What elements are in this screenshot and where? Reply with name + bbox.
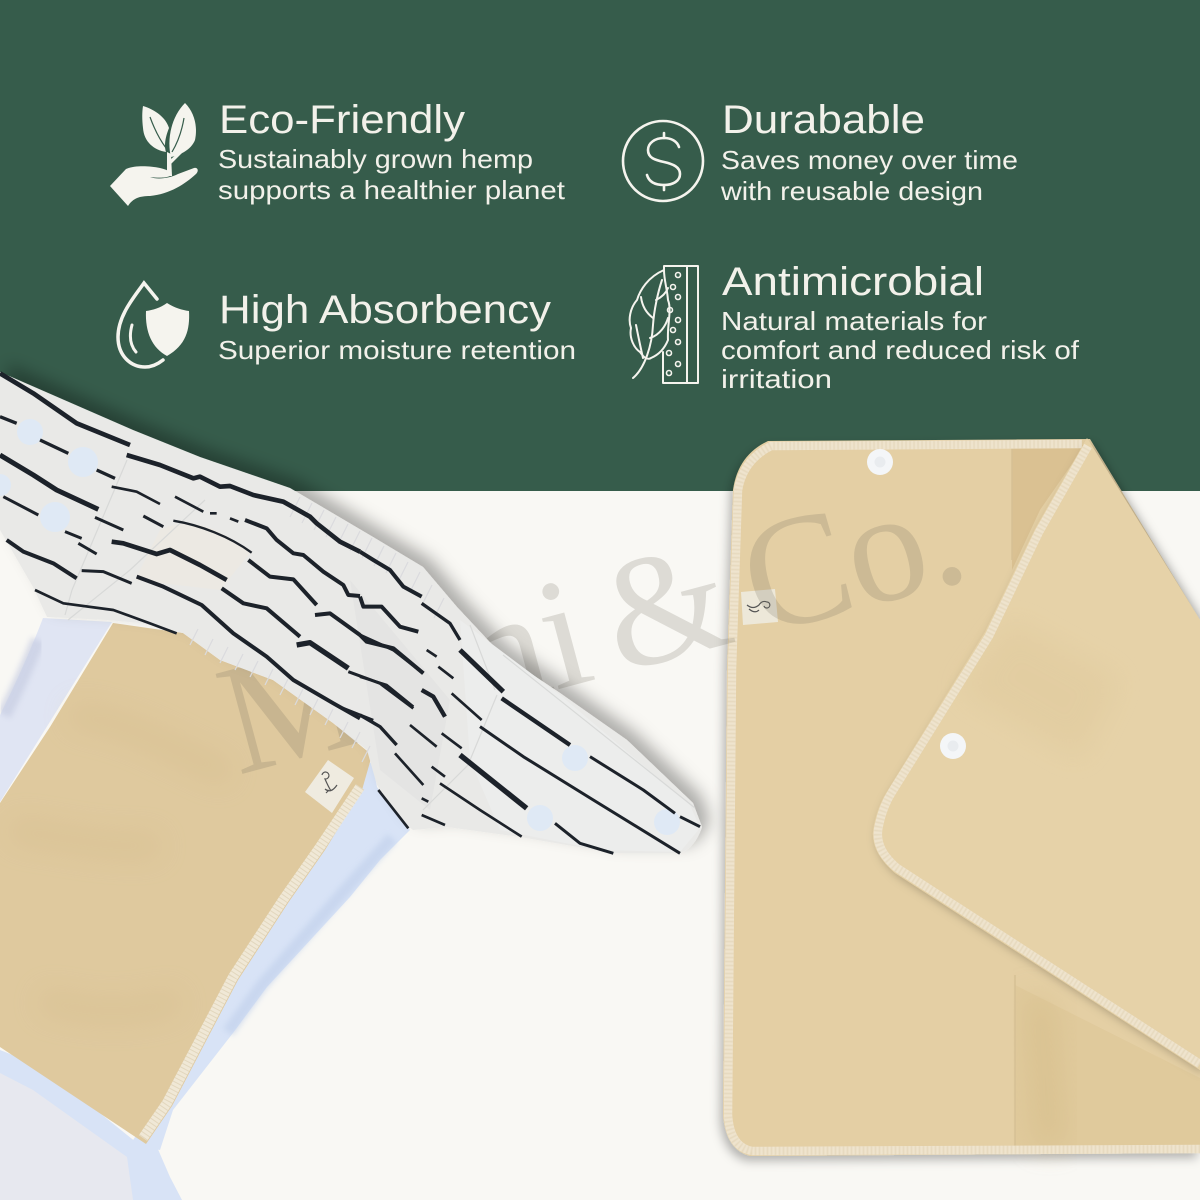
panel: green header band bbox=[0, 0, 1200, 491]
description: Saves money over time bbox=[721, 145, 1018, 175]
heading: Eco-Friendly bbox=[219, 98, 465, 142]
grey mesh panel bbox=[0, 1073, 133, 1200]
flap shape bbox=[873, 438, 1200, 1070]
description bbox=[721, 306, 1080, 394]
feature: Durable bbox=[623, 98, 1018, 206]
insert fabric shading bbox=[10, 715, 230, 1012]
description: Natural materials for bbox=[721, 306, 987, 336]
description bbox=[218, 144, 566, 205]
top snap button bbox=[867, 449, 893, 475]
wing shape bbox=[0, 372, 702, 853]
pad vertical seams bbox=[1012, 445, 1015, 1148]
description: supports a healthier planet bbox=[218, 175, 566, 205]
description: Superior moisture retention bbox=[218, 335, 576, 365]
heading: High Absorbency bbox=[219, 288, 551, 332]
wing seams bbox=[65, 460, 695, 810]
icon: dollar coin bbox=[623, 121, 703, 201]
flap stitched edge bbox=[878, 446, 1200, 1064]
icon: leaf and fabric layer bbox=[630, 266, 698, 383]
blue outer lining, upper left bbox=[0, 618, 112, 802]
wing black stripes, middle section bbox=[340, 552, 423, 720]
photo: folded hemp insert on the right bbox=[723, 439, 1200, 1156]
heading: Durabable bbox=[722, 98, 925, 142]
darker fold area, bottom bbox=[1015, 985, 1200, 1148]
insert label tag bbox=[305, 760, 354, 813]
photo: diaper body with insert bbox=[0, 618, 410, 1200]
description: comfort and reduced risk of bbox=[721, 335, 1080, 365]
icon: water drop with shield bbox=[118, 283, 189, 367]
wing black stripes, left section bbox=[0, 373, 360, 718]
photo: striped diaper wing bbox=[0, 372, 702, 853]
description: Sustainably grown hemp bbox=[218, 144, 533, 174]
blue elastic leg, lower right bbox=[130, 760, 410, 1150]
icon: hand holding sprout bbox=[110, 103, 198, 206]
photo: folded flap of the insert bbox=[873, 438, 1200, 1070]
feature: Antimicrobial bbox=[630, 260, 1080, 394]
elastic gathers bbox=[190, 497, 444, 762]
description bbox=[720, 145, 1018, 206]
flap shaded crease bbox=[960, 620, 1120, 760]
feature: High Absorbency bbox=[118, 283, 576, 367]
flap snap button bbox=[940, 733, 966, 759]
pad stitched edge bbox=[728, 444, 1200, 1151]
insert stitched seam bbox=[143, 787, 360, 1138]
main pad bbox=[723, 439, 1200, 1156]
pad label tag bbox=[741, 589, 778, 625]
wing pocket and panels bbox=[135, 524, 700, 852]
darker fold area, top bbox=[1012, 445, 1085, 570]
watermark: Mami & Co. bbox=[202, 443, 980, 809]
description: with reusable design bbox=[720, 176, 983, 206]
wing snap buttons bbox=[0, 419, 680, 835]
blue lower panel bbox=[0, 1050, 182, 1200]
feature: Eco-Friendly bbox=[110, 98, 566, 206]
description: irritation bbox=[721, 364, 832, 394]
wing black stripes, tip section bbox=[360, 603, 700, 853]
heading: Antimicrobial bbox=[722, 260, 984, 304]
tan hemp insert bbox=[0, 623, 372, 1144]
